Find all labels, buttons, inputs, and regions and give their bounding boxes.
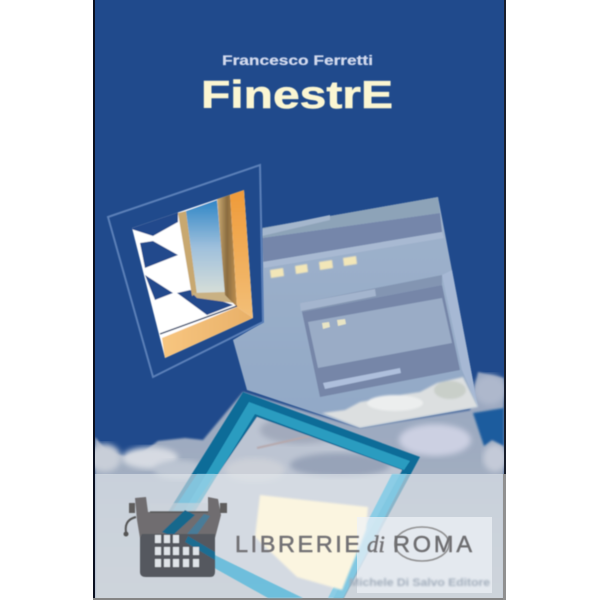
browser window illustration [233, 197, 478, 428]
clouds [89, 372, 507, 600]
typewriter body [140, 534, 215, 577]
sash bottom [192, 292, 233, 303]
keys [155, 535, 199, 567]
publisher line: Michele Di Salvo Editore [349, 577, 490, 589]
brand name: di [367, 532, 385, 557]
toolbar buttons [270, 256, 357, 278]
book cover illustration [93, 0, 506, 600]
ribbon strips [162, 510, 195, 536]
teal tilted frame [160, 392, 420, 600]
brand name: LIBRERIE [235, 531, 360, 557]
author name: Francesco Ferretti [222, 53, 373, 68]
left jamb [178, 211, 197, 296]
cloud reflection on window [322, 377, 478, 428]
white logo panel [357, 517, 492, 593]
blue window panel with outline [108, 165, 263, 377]
cover background [93, 0, 506, 600]
platen knobs [129, 503, 135, 513]
sill [162, 307, 253, 360]
checkerboard [128, 212, 233, 315]
typewriter logo [124, 497, 227, 577]
title bar [262, 213, 442, 262]
inner dialog [302, 285, 460, 397]
frame seen through band [160, 474, 407, 598]
brand name: ROMA [393, 531, 472, 557]
translucent bottom band [93, 474, 506, 600]
dialog status field [323, 368, 401, 389]
dialog buttons [322, 319, 346, 329]
sky pane [186, 200, 225, 295]
brand oval [395, 527, 449, 561]
title: FinestrE [201, 74, 393, 117]
open window with checkerboard floor [128, 188, 253, 360]
open book [255, 495, 368, 590]
typewriter carriage [135, 497, 221, 538]
brown jamb [217, 193, 237, 307]
orange jamb [230, 188, 253, 318]
